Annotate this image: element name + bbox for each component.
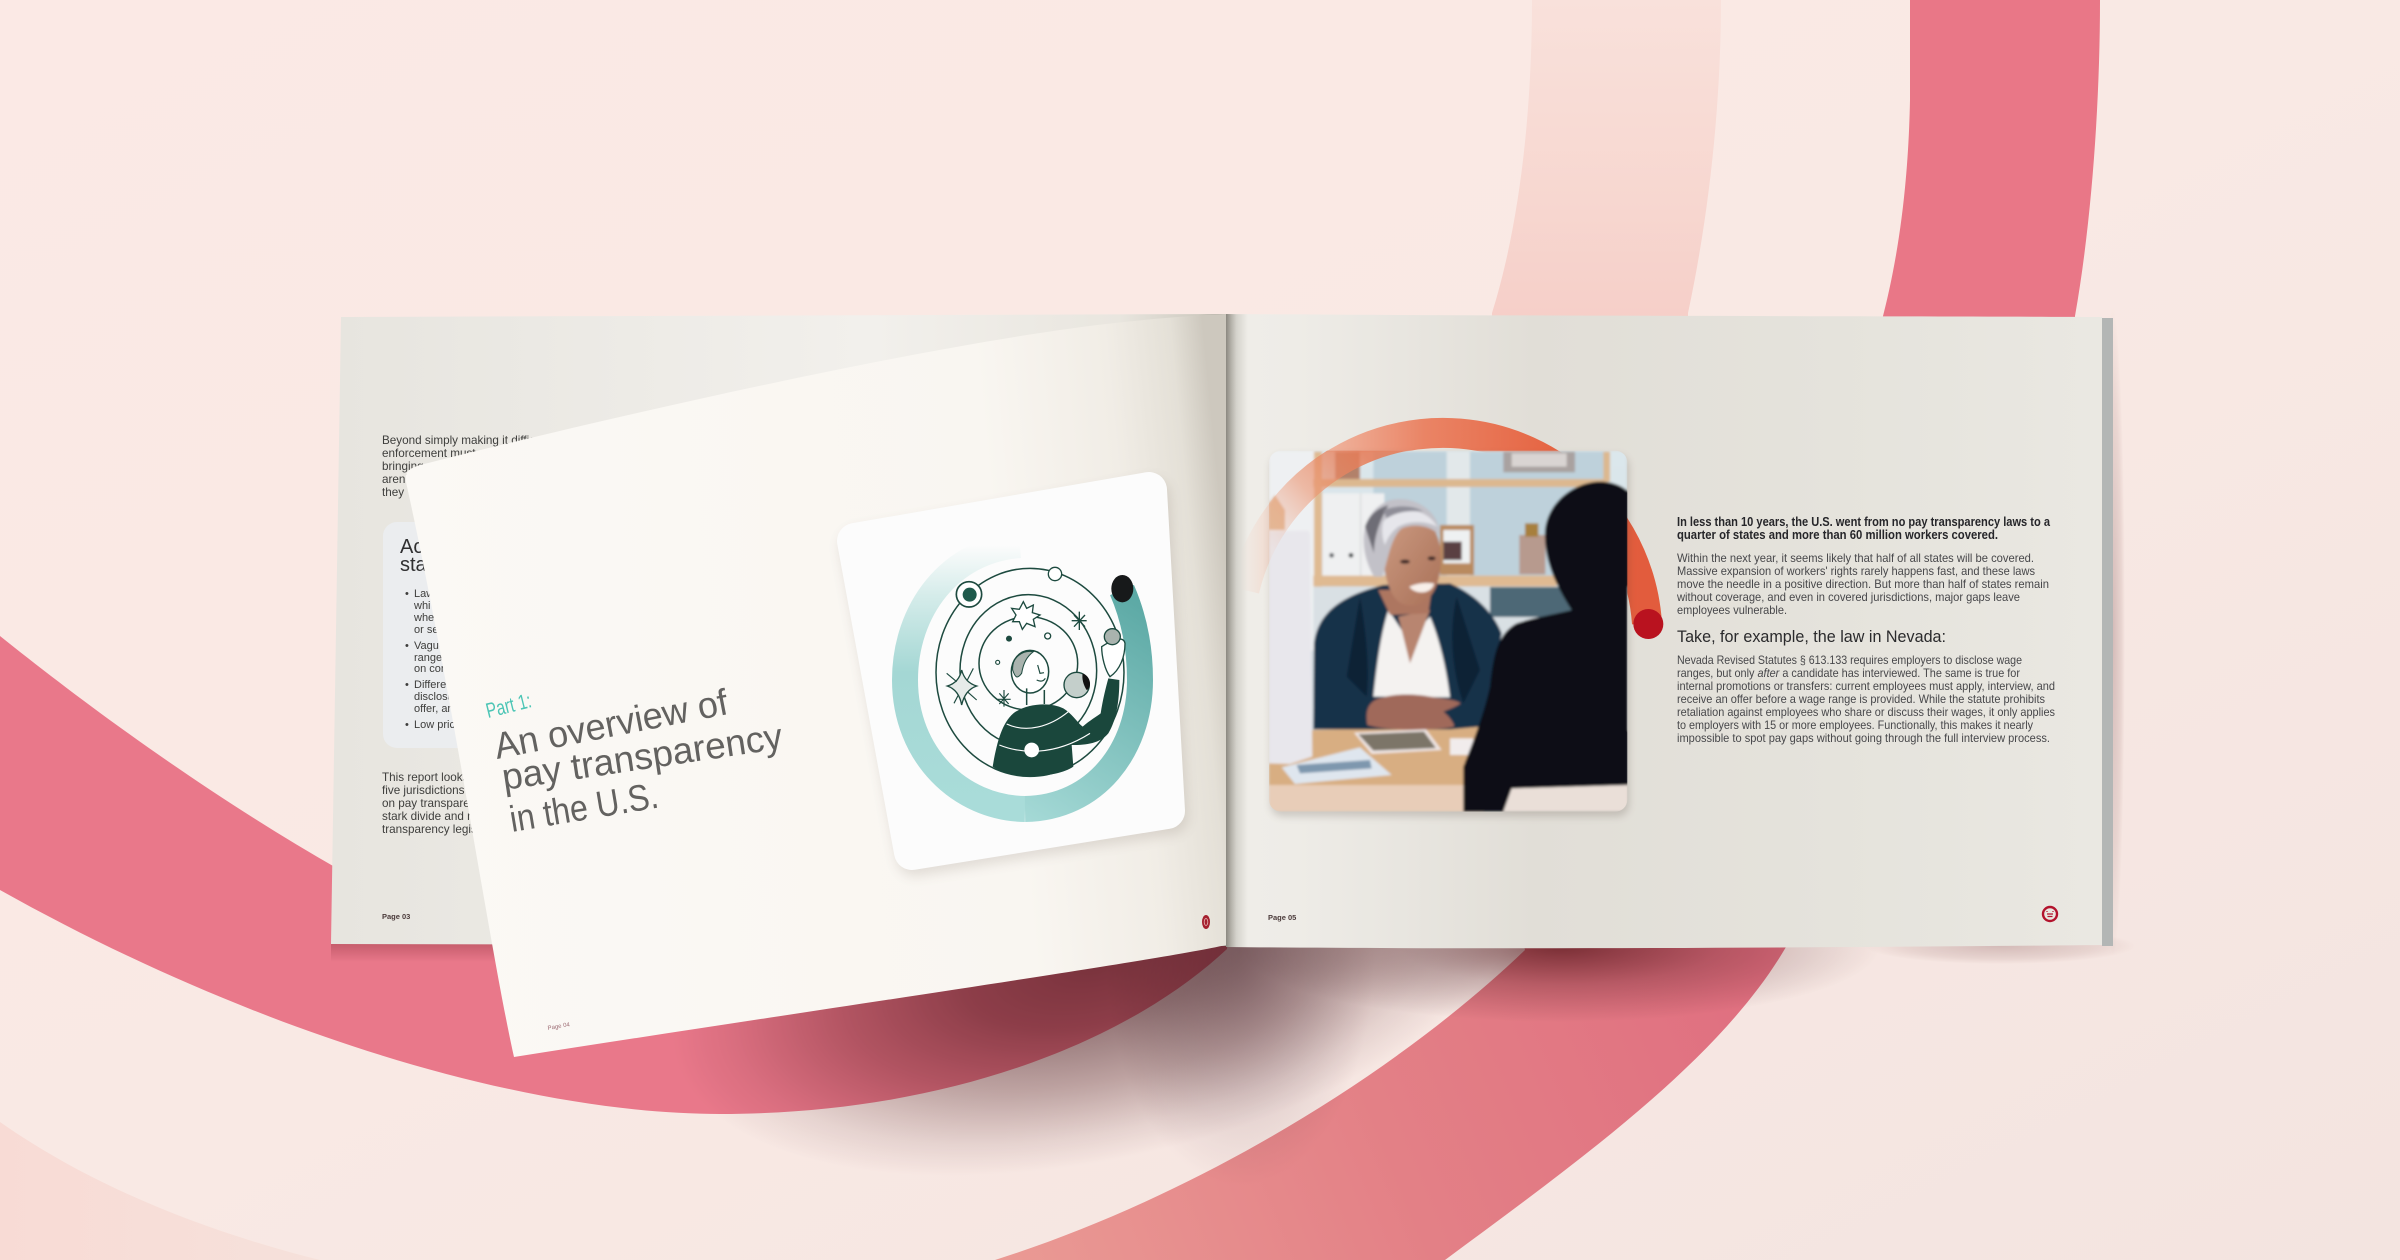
text block: intro paragraph: enforcement must (382, 447, 476, 460)
card bullets: • (405, 679, 409, 691)
card bullets: • (405, 588, 409, 600)
card bullets: whi (413, 600, 431, 612)
monitor (1269, 531, 1312, 764)
card: illustration (855, 490, 1170, 858)
card bullets: • (405, 640, 409, 652)
card heading: sta (400, 554, 428, 576)
other person (1463, 482, 1628, 812)
text block: lead (1677, 515, 2051, 542)
icon: logo turning page (1202, 915, 1210, 929)
title: part label: Part 1: (484, 689, 534, 723)
text block: report paragraph: transparency legislation (382, 823, 505, 836)
orbit illustration (936, 567, 1133, 776)
text block: Nevada paragraph: Nevada Revised Statutes § 613.133 requires employers to disclose wage (1677, 653, 2022, 667)
band: pale pink ring top (1490, 0, 1721, 400)
planets (1024, 743, 1039, 757)
card bullets: Vague (414, 640, 445, 652)
papers (1282, 747, 1392, 784)
text block: report paragraph: This report looks (382, 771, 469, 784)
stars (1012, 602, 1040, 629)
text block: body paragraph: move the needle in a positive direction. But more than half of states remain (1677, 577, 2049, 591)
orange arc behind photo (1244, 433, 1663, 639)
page edge (2102, 318, 2113, 946)
text block: intro paragraph: bringing (382, 460, 424, 473)
band: pale corner wedge (0, 1122, 320, 1260)
band: pink ring bottom right (995, 930, 1792, 1260)
text block: body paragraph: without coverage, and even in covered jurisdictions, major gaps leave (1676, 590, 2020, 604)
panel: right page (1226, 314, 2113, 948)
tablet (1354, 729, 1442, 754)
text block: Nevada paragraph: internal promotions or transfers: current employees must apply, interview, and (1677, 679, 2055, 693)
card bullets: offer, and (414, 703, 460, 715)
text block: lead: quarter of states and more than 60 million workers covered. (1677, 528, 1998, 542)
shadow under right page (1240, 872, 1880, 1022)
ring (905, 545, 1140, 809)
shadow under turning page (634, 685, 1556, 1245)
text block: report paragraph (382, 771, 505, 836)
text block: intro paragraph: Beyond simply making it difficult (382, 434, 548, 447)
text block: body paragraph (1676, 551, 2049, 617)
red dot (1633, 609, 1663, 639)
title: pay transparency (499, 715, 786, 798)
text block: report paragraph: five jurisdictions (382, 784, 465, 797)
text block: Nevada paragraph: to employers with 15 or more employees. Functionally, this makes it nearly (1677, 718, 2033, 732)
text block: Nevada paragraph: receive an offer before a wage range is provided. While the statute prohibits (1677, 692, 2045, 706)
card bullets (405, 588, 464, 731)
text block: report paragraph: stark divide and n (382, 810, 474, 823)
card bullets: Low price (414, 719, 461, 731)
card bullets: • (405, 719, 409, 731)
text block: body paragraph: employees vulnerable. (1677, 603, 1787, 617)
card bullets: on con (414, 663, 447, 675)
title: An overview of (491, 681, 732, 767)
text block: intro paragraph: aren't (382, 473, 412, 486)
page number 05: Page 05 (1268, 913, 1296, 922)
card bullets: Law (414, 588, 434, 600)
panel: left page (331, 314, 1226, 946)
photo: interview (1244, 432, 1630, 817)
card heading: Ac (400, 536, 423, 558)
card bullets: or se (414, 624, 438, 636)
callout card (383, 522, 583, 748)
panel: turning page (406, 314, 1226, 1057)
text block: Nevada paragraph: impossible to spot pay gaps without going through the full interview process. (1677, 731, 2050, 745)
text block: intro paragraph (382, 434, 548, 499)
card bullets: whe (413, 612, 434, 624)
woman (1313, 583, 1502, 729)
card heading (400, 536, 428, 576)
page number 04: Page 04 (547, 1022, 571, 1032)
text block: Nevada paragraph: retaliation against employees who share or discuss their wages, it only applies (1677, 705, 2055, 719)
text block: Nevada paragraph (1677, 653, 2055, 745)
text block: report paragraph: on pay transparency (382, 797, 488, 810)
card bullets: disclosure (414, 691, 464, 703)
head (1011, 650, 1049, 693)
card bullets: Different (414, 679, 455, 691)
heading: Nevada: Take, for example, the law in Nevada: (1677, 627, 1946, 646)
text block: body paragraph: Within the next year, it seems likely that half of all states will be covered. (1677, 551, 2034, 565)
text block: lead: In less than 10 years, the U.S. went from no pay transparency laws to a (1677, 515, 2051, 529)
text block: body paragraph: Massive expansion of workers' rights rarely happens fast, and these laws (1677, 564, 2035, 578)
title: in the U.S. (507, 775, 661, 840)
figure body (993, 678, 1119, 776)
shadow under book edge (331, 307, 2135, 964)
arc overlay on photo (1269, 450, 1408, 558)
title (491, 681, 786, 840)
card bullets: range (414, 652, 442, 664)
band: deep pink ring left (0, 636, 1230, 1114)
band: pink ring top (1882, 0, 2100, 400)
text block: intro paragraph: they (382, 486, 404, 499)
icon: logo right page (2043, 907, 2057, 921)
page number 03: Page 03 (382, 912, 410, 921)
text block: Nevada paragraph: ranges, but only after a candidate has interviewed. The same is true for (1677, 666, 2020, 680)
